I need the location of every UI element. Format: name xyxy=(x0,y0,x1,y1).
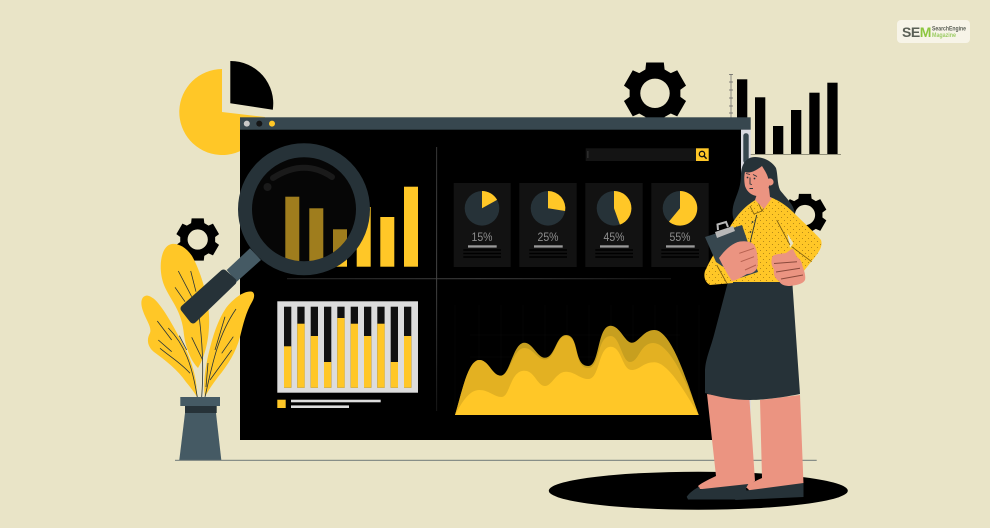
card: 55% pie xyxy=(651,183,709,267)
magnifying glass xyxy=(184,150,363,320)
small bar chart top right xyxy=(729,74,841,155)
card: 25% pie: 25% xyxy=(538,232,558,244)
shirt xyxy=(704,197,822,285)
skirt xyxy=(705,278,800,400)
clipboard xyxy=(705,222,758,278)
panel: browser window xyxy=(240,117,751,440)
card: 45% pie xyxy=(585,183,643,267)
plant pot xyxy=(179,397,221,460)
stacked chart legend xyxy=(277,400,381,408)
right hand xyxy=(771,249,805,286)
floor line xyxy=(175,460,817,461)
pie chart icon xyxy=(179,61,273,155)
neck xyxy=(755,188,772,209)
icon: gear left xyxy=(176,218,219,261)
area chart xyxy=(455,305,699,415)
card: 25% pie xyxy=(519,183,577,267)
stacked bar chart xyxy=(277,301,418,393)
icon: gear top xyxy=(624,63,686,124)
card: 55% pie: 55% xyxy=(670,232,690,244)
logo: SEM Search Engine Magazine: Magazine xyxy=(932,32,956,39)
icon: gear behind woman xyxy=(784,194,826,236)
left hand xyxy=(719,241,758,281)
woman figure xyxy=(687,157,822,500)
hair xyxy=(733,157,795,225)
face xyxy=(744,166,774,196)
card: 15% pie xyxy=(454,183,511,267)
logo: SEM Search Engine Magazine: SearchEngine xyxy=(932,26,966,32)
legs xyxy=(698,394,804,491)
bar chart main xyxy=(285,187,418,267)
plant leaves xyxy=(141,244,254,397)
card: 45% pie: 45% xyxy=(604,232,624,244)
logo: SEM Search Engine Magazine: SEM xyxy=(902,24,931,40)
card: 15% pie: 15% xyxy=(472,232,492,244)
logo: SEM Search Engine Magazine xyxy=(897,20,970,43)
shoes xyxy=(687,483,804,500)
search bar xyxy=(586,148,709,161)
ground shadow xyxy=(549,472,848,510)
